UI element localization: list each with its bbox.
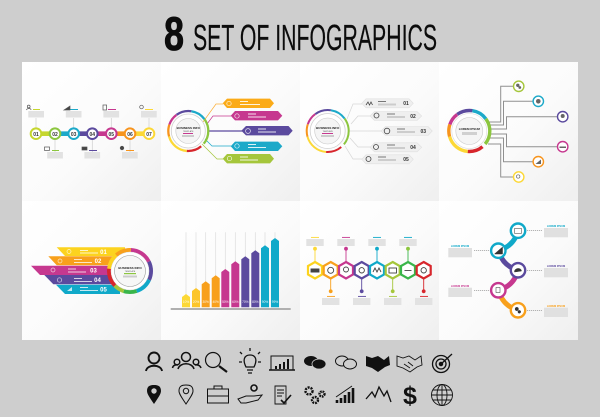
icon: hand with gear	[238, 385, 262, 403]
panel: rising arrow bar chart: 30%	[203, 300, 209, 304]
title: SET OF INFOGRAPHICS	[193, 17, 437, 58]
icon: handshake outline	[397, 356, 422, 372]
panel: rising arrow bar chart: 70%	[242, 300, 249, 304]
panel: rising arrow bar chart: 10%	[183, 300, 189, 304]
panel: seven step timeline: 01	[33, 132, 39, 138]
icon: globe	[432, 384, 452, 406]
panel: hexagon chain	[306, 237, 432, 305]
icon: zigzag	[366, 387, 391, 402]
panel: seven step timeline: 06	[127, 132, 133, 138]
panel: five arrows with ring: BUSINESS INFO	[177, 126, 201, 130]
panel: slanted bands with ring: 01	[100, 250, 107, 256]
icon: gears	[306, 388, 324, 403]
panel: five arrows with ring	[168, 99, 293, 163]
icon: map pin filled	[147, 385, 161, 404]
panel: winding circle path: LOREM IPSUM	[547, 224, 565, 228]
panel: seven step timeline	[26, 105, 157, 158]
panel: slanted bands with ring: 02	[95, 259, 102, 265]
icon row 2	[147, 382, 452, 410]
icon row 1	[146, 348, 452, 373]
panel: slanted bands with ring: 03	[90, 268, 97, 274]
icon: target	[432, 354, 452, 372]
panel: rising arrow bar chart: 20%	[193, 300, 199, 304]
panel: rising arrow bar chart: 80%	[252, 300, 259, 304]
panel: five white tabs with ring: TEMPLATE	[322, 130, 334, 133]
icon: laptop chart	[269, 356, 295, 370]
panel: rising arrow bar chart	[171, 232, 291, 310]
panel: rising arrow bar chart: 50%	[222, 300, 229, 304]
panel: slanted bands with ring: 05	[100, 288, 107, 294]
panel: seven step timeline: 05	[109, 132, 114, 138]
panel: five arrows with ring: TEMPLATE	[183, 130, 194, 133]
panel: seven step timeline: 04	[90, 132, 95, 138]
title: 8	[164, 7, 184, 60]
panel: rising arrow bar chart: 90%	[262, 300, 268, 304]
icon: speech bubbles filled	[304, 356, 326, 369]
panel: slanted bands with ring	[31, 247, 151, 294]
icon: group	[172, 352, 201, 369]
panel: slanted bands with ring: TEMPLATE	[125, 270, 136, 273]
panel: ring with connector tree: LOREM IPSUM	[459, 127, 480, 131]
panel: seven step timeline: 02	[52, 132, 58, 138]
panel: five white tabs with ring: 04	[410, 145, 416, 151]
panel: five white tabs with ring: BUSINESS INFO	[316, 126, 340, 130]
icon: map pin outline	[179, 385, 193, 404]
icon: briefcase	[208, 386, 228, 403]
panel: five white tabs with ring: 01	[403, 101, 409, 107]
icon: document with check	[275, 386, 291, 404]
panel: rising arrow bar chart: 40%	[213, 300, 219, 304]
panel backgrounds	[22, 62, 578, 340]
panel: winding circle path: LOREM IPSUM	[451, 244, 469, 248]
panel: five white tabs with ring: 02	[410, 114, 416, 120]
panel: five white tabs with ring: 03	[421, 129, 426, 135]
icon: person	[146, 352, 162, 371]
icon: magnifier	[206, 352, 227, 372]
panel: slanted bands with ring: 04	[94, 278, 101, 284]
icon: light bulb	[239, 348, 261, 373]
panel: winding circle path: LOREM IPSUM	[451, 284, 469, 288]
panel: five white tabs with ring	[307, 99, 432, 164]
panel: slanted bands with ring: BUSINESS INFO	[118, 266, 142, 270]
icon: dollar: $	[403, 382, 417, 410]
panel: rising arrow bar chart: 99%	[272, 300, 278, 304]
icon: speech bubbles outline	[336, 356, 356, 369]
panel: seven step timeline: 07	[146, 132, 152, 138]
panel: winding circle path: LOREM IPSUM	[547, 304, 565, 308]
panel: rising arrow bar chart: 60%	[232, 300, 239, 304]
panel: five white tabs with ring: 05	[403, 157, 409, 163]
panel: ring with connector tree	[449, 81, 568, 182]
icon: handshake filled	[366, 356, 390, 372]
panel: winding circle path	[448, 224, 568, 317]
title	[164, 7, 437, 60]
panel: seven step timeline: 03	[71, 132, 77, 138]
icon: rising bars	[336, 386, 353, 403]
panel: winding circle path: LOREM IPSUM	[547, 264, 565, 268]
